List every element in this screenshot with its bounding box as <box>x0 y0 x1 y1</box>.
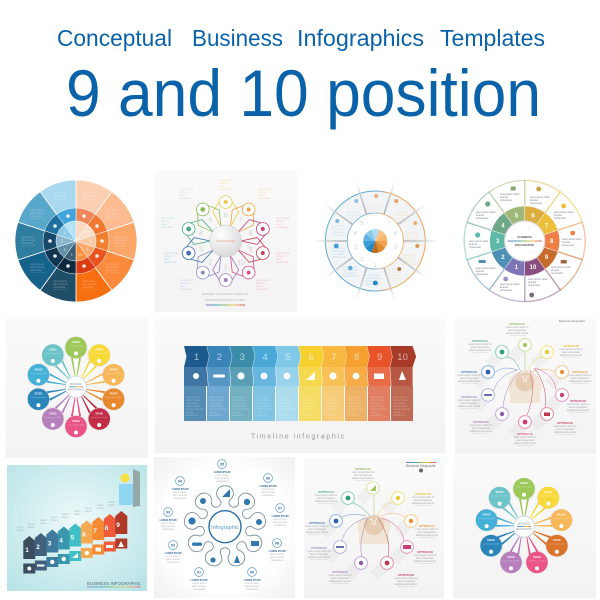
petal text lines: Lorem ipsum dolor <box>529 560 546 562</box>
option headings: OPTION 08 <box>417 550 433 554</box>
option text <box>305 471 439 587</box>
centre label: BUSINESS <box>518 523 530 526</box>
option icons <box>334 485 413 565</box>
panel background <box>155 319 445 453</box>
badge numbers: 03 <box>166 510 170 514</box>
petal text lines: Lorem ipsum dolor <box>483 544 500 546</box>
rainbow underline <box>87 586 141 588</box>
arrow numbers <box>25 522 120 554</box>
petal numbers: 3 <box>199 246 203 254</box>
option headings: OPTION 02 <box>461 395 477 399</box>
panel: rainbow outline wheel <box>155 170 297 312</box>
text blocks <box>161 179 290 291</box>
rainbow line <box>206 304 245 306</box>
lobe outline <box>183 486 267 568</box>
connector curves <box>342 495 405 557</box>
option icons <box>484 343 564 424</box>
outer ring <box>325 191 425 291</box>
lorem headings: LOREM IPSUM <box>272 515 288 518</box>
box icons <box>27 541 124 570</box>
option headings: OPTION 04 <box>318 490 334 494</box>
title <box>57 25 545 130</box>
petal labels: STAGE <box>49 412 57 416</box>
footer caption <box>202 292 248 302</box>
footer caption: LOREM IPSUM DOLOR SIT AMET <box>205 298 246 302</box>
column numbers: 9 <box>377 352 382 363</box>
footer label: BUSINESS INFOGRAPHIC <box>87 581 142 586</box>
panel: coloured petals, nine stages <box>453 455 596 598</box>
subtitle line: Business <box>192 25 283 51</box>
option circles <box>330 482 417 569</box>
option headings: OPTION 03 <box>309 521 325 525</box>
petal labels: STAGE <box>72 420 80 423</box>
arrow numbers: 1 <box>25 547 29 554</box>
inner segment numbers: 8 <box>89 238 92 244</box>
tiny step captions <box>17 501 118 531</box>
centre label <box>68 383 85 392</box>
badge numbers: 09 <box>250 570 254 574</box>
option headings: OPTION 09 <box>398 573 414 577</box>
petal labels: STAGE <box>483 514 491 517</box>
inner segment numbers: 3 <box>61 238 64 244</box>
inner numbers: 1 <box>374 263 377 269</box>
petal labels: STAGE <box>533 556 541 559</box>
petal text lines: Lorem ipsum dolor <box>553 518 570 520</box>
business infographic label: Business Infographic <box>559 319 586 323</box>
icons <box>334 194 419 285</box>
outer wheel segments <box>7 171 145 311</box>
petal text lines: Lorem ipsum dolor <box>491 496 508 498</box>
column numbers: 6 <box>308 352 314 363</box>
petal text lines: Lorem ipsum dolor <box>105 373 122 375</box>
option headings: OPTION 06 <box>415 492 431 496</box>
door <box>119 469 140 507</box>
petal numbers <box>199 212 252 272</box>
inner numbers: 3 <box>354 245 357 251</box>
long shadows <box>323 488 411 576</box>
petal labels: STAGE <box>110 368 118 371</box>
petal numbers: 6 <box>224 212 228 220</box>
petal labels: STAGE <box>558 514 566 517</box>
lorem headings: LOREM IPSUM <box>172 488 188 491</box>
panel: head with nine options <box>304 458 444 598</box>
option text <box>457 326 592 446</box>
petal labels <box>35 341 118 423</box>
petal numbers: 4 <box>199 230 203 238</box>
lorem text <box>159 474 289 591</box>
panel: timeline infographic <box>155 319 445 453</box>
panel: coloured petals, ten stages <box>6 317 148 458</box>
arrow numbers <box>496 214 554 271</box>
arrow numbers: 3 <box>496 239 500 245</box>
option headings: OPTION 09 <box>557 421 573 425</box>
arrow columns <box>23 511 127 559</box>
legend dot <box>419 468 423 472</box>
petal icons <box>485 493 563 570</box>
inner segment numbers: 5 <box>70 226 73 230</box>
ring icons <box>48 214 104 268</box>
lorem headings: LOREM IPSUM <box>160 519 176 522</box>
lorem headings <box>160 471 288 582</box>
panel: blue outline lobes <box>154 457 295 598</box>
centre rainbow <box>69 385 83 388</box>
column text <box>186 396 411 417</box>
inner numbers: 5 <box>361 221 364 227</box>
head <box>509 371 541 403</box>
petal icons <box>36 352 116 434</box>
arrow ring <box>485 201 564 281</box>
cell text blocks <box>331 205 420 285</box>
arrow numbers: 9 <box>116 522 120 529</box>
arrow numbers: 3 <box>48 540 52 548</box>
panel background <box>155 170 297 312</box>
option circles <box>482 339 568 428</box>
lower text bands <box>184 386 413 421</box>
inner numbers: 4 <box>354 231 357 237</box>
petal labels: STAGE <box>35 368 43 371</box>
main heading: 9 and 10 position <box>66 56 541 130</box>
column numbers: 8 <box>354 352 359 363</box>
inner segment numbers: 2 <box>63 247 66 252</box>
arrow numbers: 7 <box>93 528 97 535</box>
panel: head with ten options <box>455 319 596 454</box>
centre label: INFOGRAPHIC <box>516 528 533 531</box>
option headings: OPTION 01 <box>332 570 348 574</box>
lorem headings: LOREM IPSUM <box>214 471 230 474</box>
badge numbers: 02 <box>171 543 175 547</box>
column numbers <box>194 352 408 363</box>
inner segments <box>53 218 99 264</box>
center label: INFOGRAPHIC <box>216 239 235 243</box>
option headings: OPTION 07 <box>419 524 435 528</box>
wheel of outlined petals <box>179 196 273 286</box>
top chevrons <box>184 346 416 367</box>
column numbers: 3 <box>240 352 245 363</box>
connector curves <box>493 352 556 415</box>
option headings: OPTION 08 <box>570 399 586 403</box>
centre label <box>516 523 533 531</box>
badge numbers: 07 <box>278 506 282 510</box>
inner ring <box>347 213 403 269</box>
subtitle line: Conceptual <box>57 25 172 51</box>
petal numbers: 10 <box>237 260 245 266</box>
centre label <box>515 235 534 247</box>
lorem headings: LOREM IPSUM <box>191 579 207 582</box>
arrow numbers: 7 <box>545 223 549 229</box>
petal text lines: Lorem ipsum dolor <box>91 417 108 419</box>
option headings: OPTION 06 <box>563 344 579 348</box>
option headings: OPTION 10 <box>517 432 533 436</box>
panel: blue and orange wheel <box>7 171 145 311</box>
panel: staircase of arrows <box>7 465 147 591</box>
inner numbers: 9 <box>394 245 397 251</box>
cell icons <box>475 186 575 297</box>
petal text lines: Lorem ipsum dolor <box>30 373 47 375</box>
lorem headings: LOREM IPSUM <box>165 552 181 555</box>
subtitle line: Templates <box>440 25 545 51</box>
badge numbers: 01 <box>197 570 201 574</box>
panel background <box>6 317 148 458</box>
middle icon bands <box>184 367 413 386</box>
arrow numbers: 2 <box>501 255 505 261</box>
outer segment text <box>21 192 131 290</box>
petal labels: STAGE <box>487 539 495 542</box>
petal text lines: Lorem ipsum dolor <box>45 353 61 355</box>
inner numbers <box>354 221 397 269</box>
spokes <box>313 182 437 300</box>
petal numbers: 1 <box>224 264 228 272</box>
centre rainbow <box>517 525 531 528</box>
petal labels <box>483 482 566 559</box>
centre circle <box>66 376 86 398</box>
arrow ring <box>39 203 113 279</box>
petal labels: STAGE <box>72 341 80 344</box>
column numbers: 5 <box>285 352 291 363</box>
arrow numbers: 1 <box>515 265 519 271</box>
arrow numbers: 6 <box>82 532 86 538</box>
legend label: Business Infographic <box>406 464 436 468</box>
arrow numbers: 6 <box>531 214 535 220</box>
column numbers: 4 <box>263 352 268 363</box>
icon boxes <box>23 538 127 574</box>
panel background <box>455 319 596 454</box>
center disc <box>210 225 242 257</box>
subtitle line: Infographics <box>297 25 424 51</box>
petal labels: STAGE <box>95 348 104 352</box>
badge numbers <box>166 462 282 574</box>
arrow numbers: 8 <box>105 525 109 532</box>
option headings: OPTION 02 <box>311 546 327 550</box>
centre ring <box>209 511 241 543</box>
petal labels: STAGE <box>95 412 104 416</box>
petal numbers: 8 <box>248 230 252 238</box>
option headings <box>461 322 588 436</box>
petal labels: STAGE <box>520 482 528 485</box>
inner numbers: 8 <box>394 231 397 237</box>
column numbers: 1 <box>194 352 199 363</box>
arrow numbers: 2 <box>36 544 40 551</box>
inner segment numbers: 6 <box>79 226 82 230</box>
inner numbers: 2 <box>361 257 364 263</box>
centre disc <box>505 221 545 261</box>
long shadows <box>475 345 562 435</box>
petal text lines: Lorem ipsum dolor <box>478 518 495 520</box>
lorem headings: LOREM IPSUM <box>244 579 260 582</box>
column icons <box>193 371 406 380</box>
petal text lines: Lorem ipsum dolor <box>503 560 520 562</box>
panel background <box>7 465 147 591</box>
inner numbers: 7 <box>387 221 390 227</box>
arrow numbers: 8 <box>550 239 554 245</box>
outer cells <box>456 171 593 311</box>
petal labels: STAGE <box>507 556 515 559</box>
head <box>357 515 391 544</box>
option headings: OPTION 04 <box>472 339 488 343</box>
inner segment numbers: 10 <box>78 252 83 257</box>
inner segment numbers <box>61 226 92 257</box>
panel: rainbow arrow wheel with text cells <box>456 171 593 311</box>
petal numbers: 9 <box>248 246 252 254</box>
arrow numbers: 10 <box>530 265 537 271</box>
inner segment numbers: 7 <box>86 230 89 236</box>
arrow numbers: 9 <box>545 255 549 261</box>
petals and spokes <box>24 336 128 438</box>
lorem headings: LOREM IPSUM <box>269 550 285 553</box>
petals and spokes <box>474 478 574 577</box>
centre pie <box>358 224 393 258</box>
petal labels: STAGE <box>110 393 118 396</box>
option headings: OPTION 07 <box>572 370 588 374</box>
inner segment numbers: 1 <box>70 252 73 257</box>
badge numbers: 06 <box>266 476 270 480</box>
centre label: INFOGRAPHIC <box>68 388 85 392</box>
petal numbers: 2 <box>208 260 212 266</box>
petal text lines: Lorem ipsum dolor <box>105 397 122 399</box>
number badges <box>164 460 284 576</box>
panel background <box>154 457 295 598</box>
lobe icons <box>188 489 262 563</box>
petal text lines: Lorem ipsum dolor <box>540 496 557 498</box>
petal numbers: 7 <box>239 218 243 224</box>
option headings: OPTION 03 <box>461 370 477 374</box>
arrow numbers: 4 <box>59 538 63 544</box>
petal text lines <box>30 346 122 426</box>
inner segment numbers: 4 <box>63 230 66 236</box>
arrow numbers: 4 <box>501 223 505 229</box>
petal text lines: Lorem ipsum dolor <box>516 487 533 489</box>
badge numbers: 04 <box>178 479 183 483</box>
caption: Timeline infographic <box>251 434 344 440</box>
centre label: INFOGRAPHIC <box>515 243 534 247</box>
centre label: BUSINESS <box>518 235 532 239</box>
petal labels: STAGE <box>496 491 504 494</box>
petal labels: STAGE <box>35 393 43 396</box>
panel background <box>453 455 596 598</box>
petal text lines: Lorem ipsum dolor <box>549 544 566 546</box>
panel: pale circular diagram with colour pie <box>313 182 437 300</box>
petal text lines: Lorem ipsum dolor <box>68 346 85 348</box>
footer caption: BUSINESS INFOGRAPHIC TEMPLATE <box>202 292 248 296</box>
centre circle <box>514 516 534 537</box>
petal text lines: Lorem ipsum dolor <box>68 424 85 426</box>
petal text lines: Lorem ipsum dolor <box>91 353 108 355</box>
centre label: Infographic <box>211 525 239 531</box>
petal labels: STAGE <box>553 539 561 542</box>
centre rainbow line <box>508 240 542 242</box>
petal labels: STAGE <box>545 491 553 494</box>
petal text lines: Lorem ipsum dolor <box>45 417 61 419</box>
petal numbers: 5 <box>208 218 212 224</box>
option headings: OPTION 05 <box>355 467 371 471</box>
petal labels: STAGE <box>49 348 57 352</box>
panel background <box>304 458 444 598</box>
cell text blocks <box>469 193 582 292</box>
petal text lines: Lorem ipsum dolor <box>30 397 47 399</box>
column numbers: 2 <box>217 352 222 363</box>
badge numbers: 05 <box>220 462 224 466</box>
cells <box>325 191 425 291</box>
lorem headings: LOREM IPSUM <box>260 485 276 488</box>
option headings: OPTION 05 <box>509 322 525 326</box>
rainbow legend line <box>406 462 436 463</box>
column numbers: 10 <box>397 352 408 363</box>
petal text lines <box>478 487 570 562</box>
arrow numbers: 5 <box>71 534 75 542</box>
inner segment numbers: 9 <box>86 247 89 252</box>
column numbers: 7 <box>331 352 337 363</box>
centre label: BUSINESS <box>70 383 82 386</box>
arrow numbers: 5 <box>515 214 519 220</box>
option headings <box>309 467 435 577</box>
badge numbers: 08 <box>275 541 279 545</box>
option headings: OPTION 01 <box>473 420 489 424</box>
